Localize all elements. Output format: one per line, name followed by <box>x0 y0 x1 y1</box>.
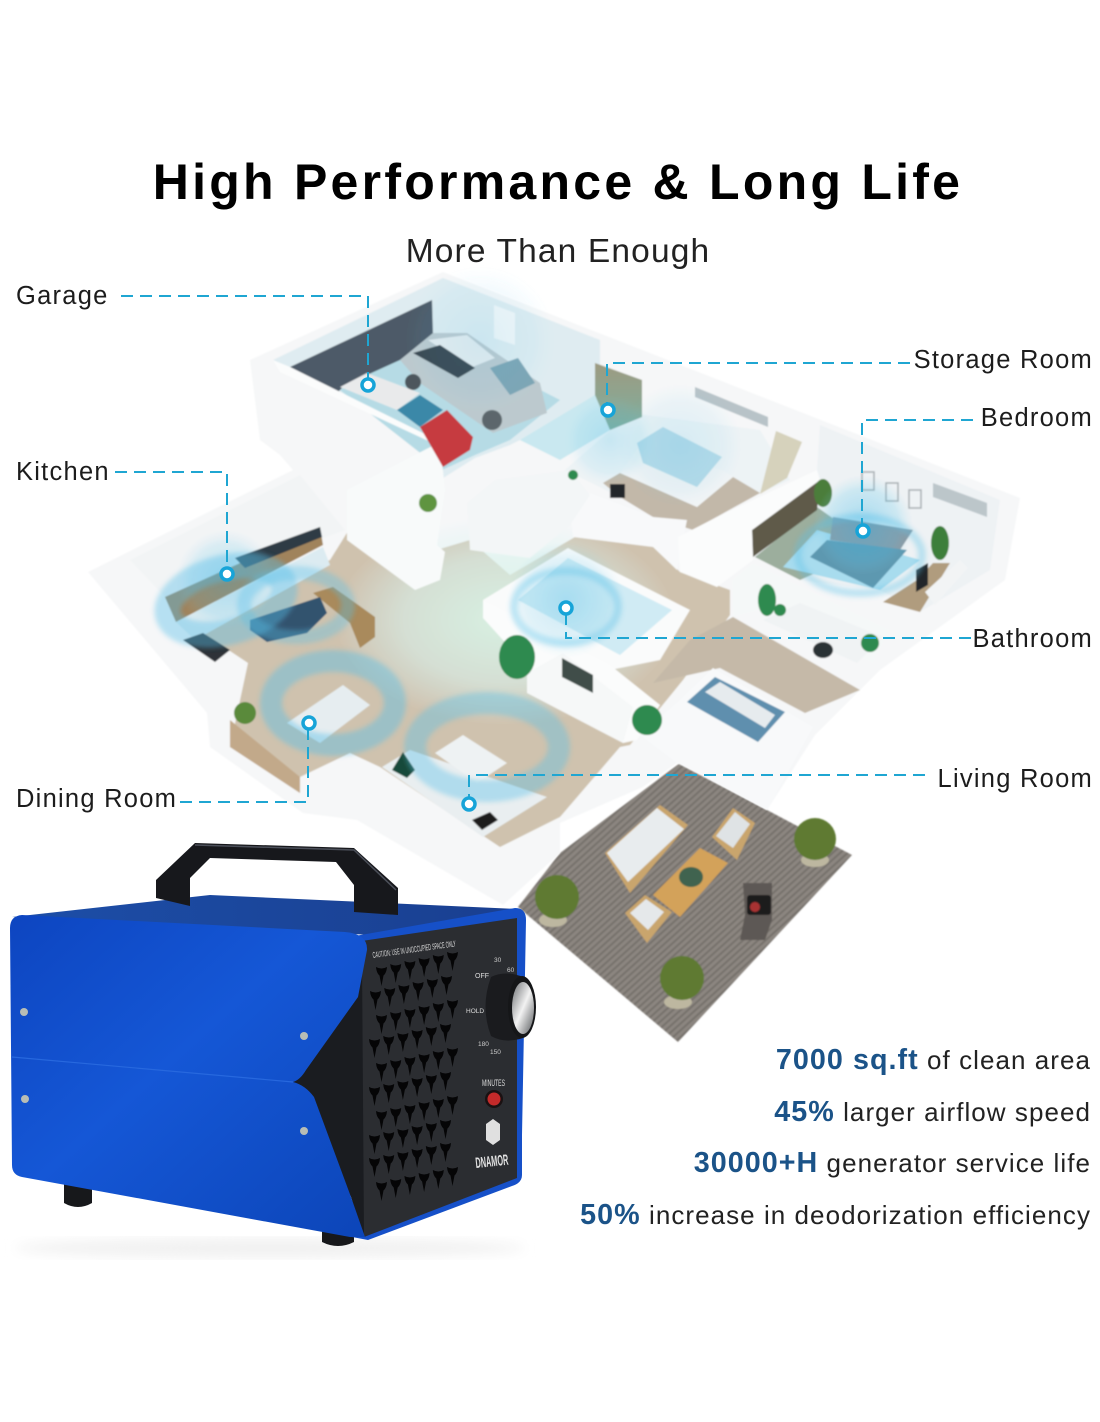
subtitle: More Than Enough <box>406 233 710 270</box>
timer knob <box>486 974 536 1041</box>
bedroom one <box>565 387 802 530</box>
bottom bedroom <box>640 668 813 810</box>
handle highlight <box>195 845 396 890</box>
storage lower floor <box>520 395 610 460</box>
corridor walls <box>570 493 687 570</box>
callout lines <box>115 296 973 804</box>
stat: service life: 30000+H generator service life <box>694 1147 1091 1179</box>
tv wall <box>483 600 660 743</box>
outer walls <box>88 272 1020 905</box>
panel seam <box>12 1057 293 1082</box>
front panel <box>352 918 517 1237</box>
room labels <box>16 282 1093 813</box>
room labels: Dining Room <box>16 785 177 813</box>
stat: deodorization: 50% increase in deodorization efficiency <box>580 1199 1091 1231</box>
balcony floor <box>230 720 300 793</box>
room labels: Kitchen <box>16 458 110 486</box>
product: ozone generator: 180 <box>478 1041 489 1048</box>
room labels: Bathroom <box>972 625 1093 653</box>
patio <box>518 763 852 1042</box>
stats <box>580 1044 1091 1231</box>
tv cabinet <box>527 653 633 743</box>
tv <box>562 658 593 693</box>
garage <box>273 278 600 480</box>
product: ozone generator: 150 <box>490 1049 501 1056</box>
title: High Performance & Long Life <box>153 154 963 210</box>
vent holes <box>369 952 458 1201</box>
small bathroom <box>467 470 590 558</box>
inner notch <box>293 960 364 1237</box>
room labels: Garage <box>16 282 109 310</box>
room labels: Bedroom <box>981 404 1093 432</box>
stat: area: 7000 sq.ft of clean area <box>776 1044 1091 1076</box>
side panel <box>10 915 367 1237</box>
stat: airflow: 45% larger airflow speed <box>774 1096 1091 1128</box>
living room furniture <box>382 735 547 837</box>
kitchen <box>130 475 375 662</box>
product: ozone generator: OFF <box>475 973 489 980</box>
ozone glows <box>176 265 913 658</box>
feet <box>64 1170 354 1246</box>
central haze <box>335 515 675 725</box>
product: ozone generator: HOLD <box>466 1008 484 1015</box>
product: ozone generator: 60 <box>507 967 515 974</box>
product: ozone generator: 30 <box>494 957 502 964</box>
ozone waves <box>160 517 922 791</box>
product shadow <box>15 1238 525 1258</box>
product: ozone generator: CAUTION: USE IN UNOCCUPIED SPACE ONLY <box>372 938 457 960</box>
screws <box>20 1008 308 1135</box>
room labels: Living Room <box>938 765 1093 793</box>
office chair <box>813 642 833 658</box>
bedroom two <box>752 425 1000 612</box>
bathroom floor <box>518 558 672 655</box>
room labels: Storage Room <box>914 346 1093 374</box>
product: ozone generator: DNAMOR <box>475 1152 509 1172</box>
floor plan <box>88 265 1020 905</box>
callout markers <box>221 379 869 810</box>
kitchen divider wall <box>347 442 445 590</box>
product: ozone generator <box>10 843 536 1258</box>
handle <box>156 843 398 915</box>
red button <box>485 1090 503 1108</box>
plants <box>234 470 949 735</box>
office desk <box>763 603 883 663</box>
brand logo <box>486 1119 500 1145</box>
office floor <box>653 617 860 713</box>
front flange <box>352 908 526 1240</box>
bathroom walls <box>483 548 690 670</box>
top face <box>12 895 517 935</box>
product: ozone generator: MINUTES <box>482 1078 505 1088</box>
dining table <box>287 685 370 743</box>
cars <box>340 333 547 467</box>
main wood floor <box>190 528 730 847</box>
storage room <box>595 363 642 430</box>
